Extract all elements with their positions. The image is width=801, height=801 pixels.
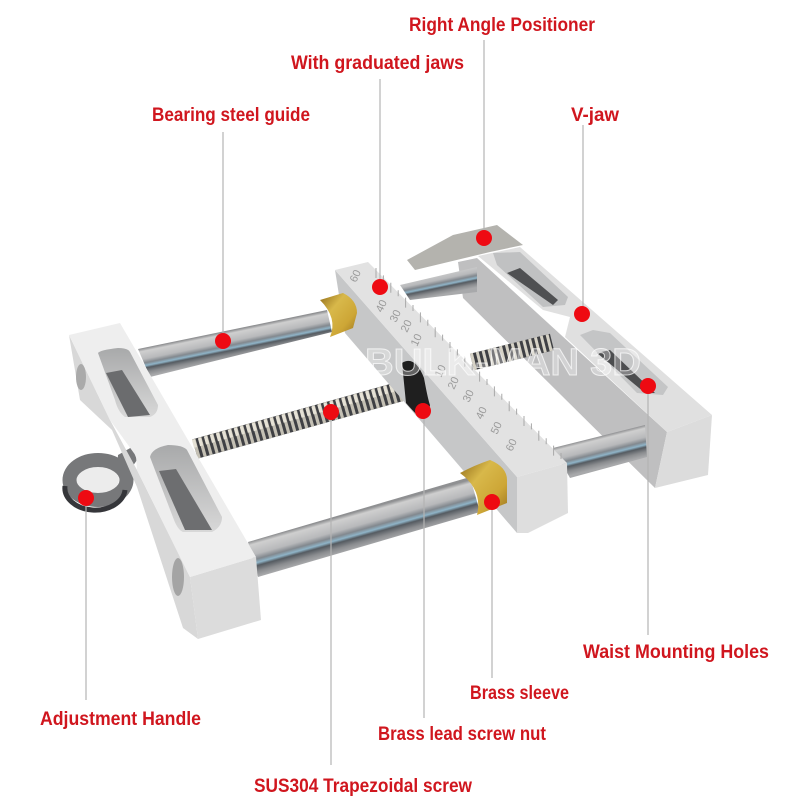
rear guide rod right section (400, 267, 477, 300)
label: V-jaw: V-jaw (571, 105, 619, 126)
label: Bearing steel guide: Bearing steel guide (152, 105, 310, 126)
right guide rod front section (553, 425, 647, 478)
scale ticks (376, 268, 561, 459)
mounting hole lower (172, 558, 184, 596)
scale numbers: 20 (399, 318, 415, 334)
label: Brass sleeve: Brass sleeve (470, 683, 569, 704)
scale numbers: 40 (474, 405, 490, 421)
mounting hole (76, 364, 86, 390)
callout markers (78, 230, 656, 510)
brass lead screw nut (402, 361, 430, 418)
slot one (98, 348, 158, 417)
scale numbers (348, 268, 520, 453)
brass sleeve front (460, 460, 507, 515)
label: Brass lead screw nut: Brass lead screw nut (378, 724, 547, 745)
leader lines (86, 40, 648, 765)
right rail: rear block with V-jaw (458, 247, 712, 488)
guide rod left back (138, 310, 332, 377)
scale numbers: 50 (489, 420, 505, 436)
product: precision vise (65, 225, 712, 639)
scale numbers: 60 (504, 437, 520, 453)
brass sleeve rear (320, 293, 357, 337)
scale numbers: 30 (388, 308, 404, 324)
label: Right Angle Positioner: Right Angle Positioner (409, 15, 596, 36)
eye ring handle (65, 447, 137, 510)
scale numbers: 20 (446, 375, 462, 391)
right angle positioner (407, 225, 523, 270)
scale numbers: 30 (461, 388, 477, 404)
left block (69, 323, 261, 639)
scale numbers: 40 (374, 298, 390, 314)
scale numbers: 10 (409, 332, 425, 348)
trapezoidal screw front section (193, 381, 420, 449)
scale numbers: 60 (348, 268, 364, 284)
label: SUS304 Trapezoidal screw: SUS304 Trapezoidal screw (254, 776, 472, 797)
trapezoidal screw rear section (472, 342, 552, 362)
label: With graduated jaws: With graduated jaws (291, 53, 464, 74)
slot two (150, 445, 222, 532)
middle block with graduated jaw (335, 262, 568, 533)
label: Waist Mounting Holes: Waist Mounting Holes (583, 642, 769, 663)
watermark: BULK-MAN 3D (365, 342, 641, 384)
label: Adjustment Handle: Adjustment Handle (40, 709, 201, 730)
guide rod left front (248, 477, 480, 577)
scale numbers: 10 (433, 363, 449, 379)
